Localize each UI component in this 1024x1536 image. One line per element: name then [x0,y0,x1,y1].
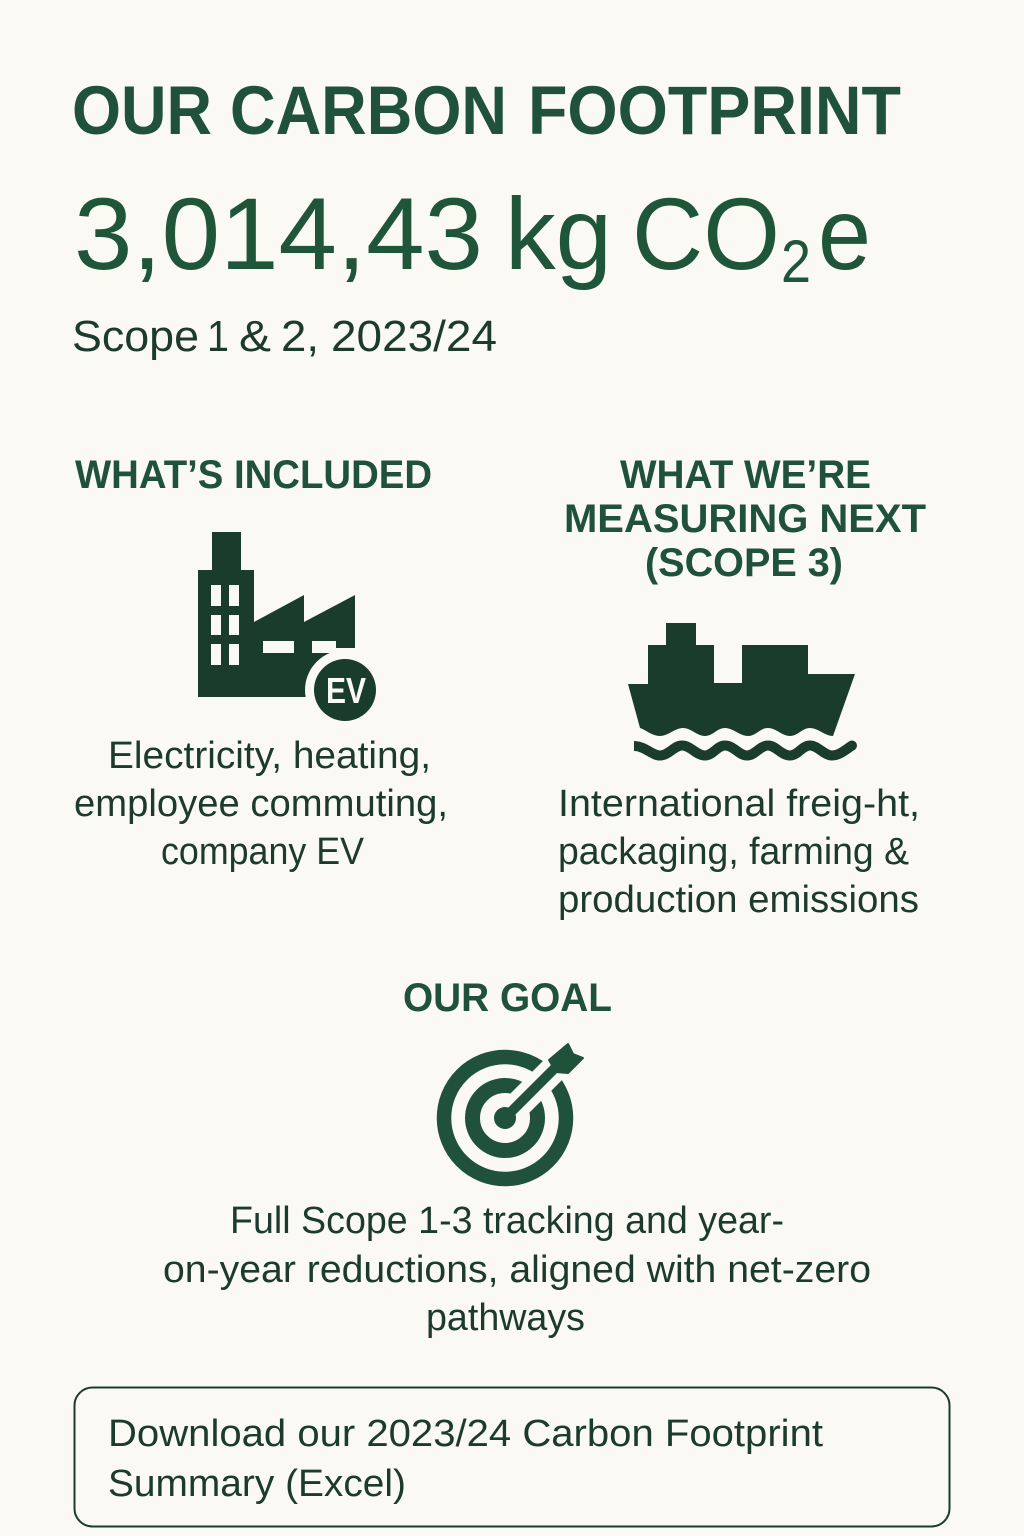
text: goal description [163,1200,871,1339]
icon: factory with EV badge: EV [326,670,366,711]
title [72,72,901,149]
text: included items: company EV [161,831,365,873]
title: OUR [72,72,212,149]
text: included items [74,735,448,873]
text: included items: Electricity, heating, [108,735,431,777]
subtitle: scope and year: Scope [72,312,199,361]
heading: what we're measuring next: WHAT WE’RE [620,453,871,497]
text: scope 3 items: packaging, farming & [558,831,909,873]
headline figure: 3,014,43 kg CO2e: kg [505,177,612,291]
text: goal description: Full Scope 1-3 tracking and year- [230,1200,784,1242]
headline figure: 3,014,43 kg CO2e: 3,014,43 [74,177,483,291]
subtitle: scope and year: 2, [281,312,319,361]
title: CARBON [230,72,507,149]
subtitle: scope and year: 2023/24 [331,312,497,361]
icon: target with arrow [444,1038,585,1179]
icon: factory with EV badge [198,532,385,730]
icon: cargo ship [628,623,857,756]
heading: what we're measuring next: MEASURING NEXT [564,497,926,541]
headline figure: 3,014,43 kg CO2e: 2 [781,228,811,295]
heading: what's included: WHAT’S INCLUDED [75,453,432,497]
heading: what we're measuring next [564,453,926,585]
download button: Download our 2023/24 Carbon Footprint [108,1413,823,1455]
heading: what we're measuring next: (SCOPE 3) [645,541,843,585]
text: goal description: on-year reductions, aligned with net-zero [163,1249,871,1291]
title: FOOTPRINT [528,72,901,149]
text: scope 3 items: production emissions [558,879,919,921]
subtitle: scope and year [72,312,497,361]
heading: our goal: OUR GOAL [403,976,612,1020]
subtitle: scope and year: 1 [207,312,229,361]
headline figure: 3,014,43 kg CO2e: CO [632,177,780,291]
download button [74,1388,950,1526]
headline figure: 3,014,43 kg CO2e [74,177,871,295]
headline figure: 3,014,43 kg CO2e: e [818,177,871,291]
text: scope 3 items: International freig-ht, [558,783,920,825]
text: goal description: pathways [426,1297,585,1339]
text: included items: employee commuting, [74,783,448,825]
subtitle: scope and year: & [239,312,271,361]
download button: Summary (Excel) [108,1463,406,1505]
text: scope 3 items [558,783,920,921]
